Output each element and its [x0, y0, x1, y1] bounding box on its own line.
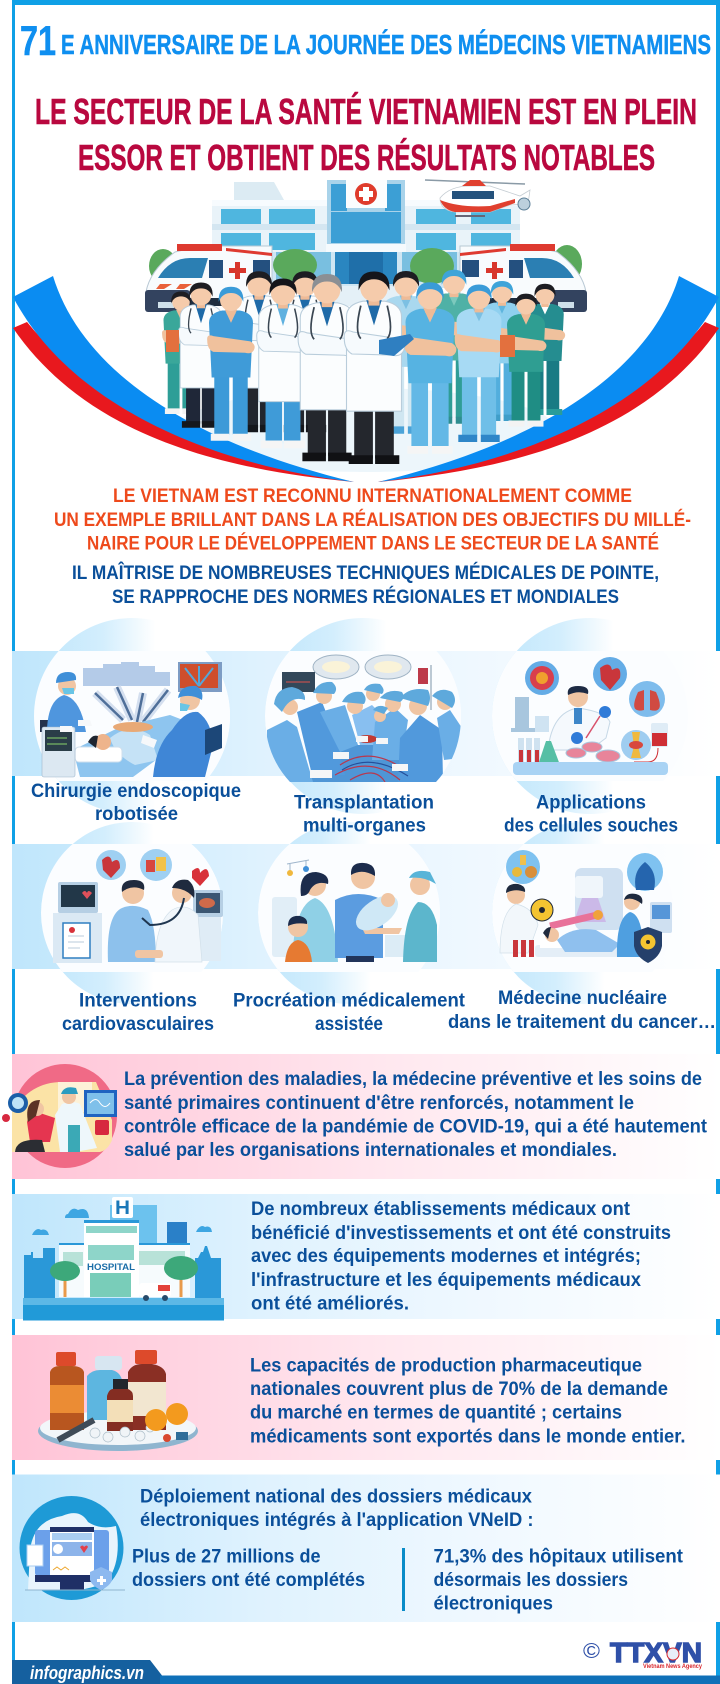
caption: robotic surgery: [31, 781, 241, 825]
footer bar with site name: [12, 1660, 720, 1684]
panel: nuclear medicine: [492, 822, 674, 1004]
ambulance right: [460, 244, 587, 312]
prevention text: salué par les organisations internationales et mondiales.: [124, 1140, 617, 1161]
caption: robotic surgery: Chirurgie endoscopique: [31, 781, 241, 802]
records heading: électroniques intégrés à l'application VNeID :: [140, 1510, 534, 1531]
panel: cardiovascular interventions: [41, 822, 223, 1004]
pharmaceuticals text: médicaments sont exportés dans le monde entier.: [250, 1426, 686, 1448]
logo: TTXVN: Vietnam News Agency: [643, 1664, 703, 1670]
icon: hospital scene: HOSPITAL: [87, 1262, 136, 1272]
panel: robotic endoscopic surgery: [34, 618, 230, 814]
hospital building: [212, 180, 520, 306]
intro statement in blue: IL MAÎTRISE DE NOMBREUSES TECHNIQUES MÉDICALES DE POINTE,: [72, 560, 659, 584]
caption: reproduction: assistée: [315, 1014, 383, 1035]
caption: reproduction: [233, 990, 466, 1035]
caption: transplant: [294, 792, 434, 836]
caption: nuclear medicine: [448, 988, 716, 1033]
caption: stem cells: [504, 792, 678, 836]
icon: hospital scene: H: [115, 1198, 130, 1219]
ambulance left: [145, 244, 272, 312]
helicopter: [425, 180, 530, 216]
caption: cardiovascular: Interventions: [79, 990, 197, 1012]
main heading: [35, 91, 697, 178]
caption: robotic surgery: robotisée: [95, 804, 178, 825]
infrastructure text: ont été améliorés.: [251, 1293, 409, 1314]
panel: infrastructure: [12, 1194, 720, 1320]
panel: prevention: [2, 1054, 720, 1179]
caption: cardiovascular: cardiovasculaires: [62, 1014, 214, 1035]
infrastructure text: De nombreux établissements médicaux ont: [251, 1199, 631, 1220]
prevention text: La prévention des maladies, la médecine préventive et les soins de: [124, 1069, 702, 1090]
caption: stem cells: Applications: [536, 792, 646, 814]
intro statement in blue: SE RAPPROCHE DES NORMES RÉGIONALES ET MONDIALES: [112, 585, 619, 608]
caption: cardiovascular: [62, 990, 214, 1035]
icon: vaccination: [2, 1064, 117, 1168]
prevention text: contrôle efficace de la pandémie de COVID-19, qui a été hautement: [124, 1116, 708, 1137]
pharmaceuticals text: nationales couvrent plus de 70% de la demande: [250, 1379, 668, 1400]
ground shadow: [176, 388, 556, 472]
intro statement in orange: LE VIETNAM EST RECONNU INTERNATIONALEMENT COMME: [113, 485, 632, 507]
caption: nuclear medicine: Médecine nucléaire: [498, 988, 667, 1009]
medical team: [162, 270, 565, 464]
icon: medicine bottles: [38, 1350, 198, 1451]
ribbon right: [378, 276, 719, 482]
logo: TTXVN: TTXVN: [610, 1637, 702, 1668]
panel: multi-organ transplant: [265, 618, 462, 814]
caption: transplant: Transplantation: [294, 792, 434, 814]
title: anniversary line: [20, 17, 711, 64]
footer bar with site name: infographics.vn: [30, 1663, 144, 1683]
prevention text: [124, 1069, 708, 1161]
intro statement in orange: [54, 485, 691, 554]
stat: 71.3 percent of hospitals: désormais les dossiers: [434, 1570, 628, 1591]
intro statement in blue: [72, 560, 659, 608]
icon: EMR screen: [20, 1496, 125, 1600]
caption: stem cells: des cellules souches: [504, 816, 678, 836]
caption: transplant: multi-organes: [303, 816, 426, 836]
infrastructure text: avec des équipements modernes et intégrés;: [251, 1246, 641, 1267]
hero illustration: ribbons, hospital and medical team: [13, 180, 719, 482]
stat: 27 million records: Plus de 27 millions de: [132, 1546, 320, 1567]
stat: 71.3 percent of hospitals: électroniques: [434, 1594, 553, 1615]
prevention text: santé primaires continuent d'être renforcés, notamment le: [124, 1093, 634, 1114]
icon: hospital scene: [23, 1197, 224, 1320]
panel: assisted reproduction: [258, 822, 440, 1004]
records heading: [140, 1486, 534, 1531]
caption: nuclear medicine: dans le traitement du cancer…: [448, 1012, 716, 1033]
panel: techniques row 1 band: [12, 651, 720, 776]
infrastructure text: bénéficié d'investissements et ont été construits: [251, 1223, 671, 1244]
divider: [402, 1548, 405, 1611]
caption: reproduction: Procréation médicalement: [233, 990, 466, 1012]
title: anniversary line: 71: [20, 17, 56, 64]
panel: electronic medical records: [12, 1474, 720, 1622]
records heading: Déploiement national des dossiers médicaux: [140, 1486, 532, 1507]
stat: 27 million records: [132, 1546, 365, 1591]
stat: 27 million records: dossiers ont été complétés: [132, 1570, 365, 1591]
stat: 71.3 percent of hospitals: 71,3% des hôpitaux utilisent: [434, 1546, 684, 1567]
infrastructure text: l'infrastructure et les équipements médicaux: [251, 1270, 641, 1291]
infrastructure text: [251, 1199, 671, 1314]
stat: 71.3 percent of hospitals: [434, 1546, 684, 1615]
panel: pharmaceuticals: [12, 1335, 720, 1460]
ribbon left: [13, 276, 354, 482]
pharmaceuticals text: [250, 1355, 686, 1448]
panel: stem cell applications: [492, 618, 668, 814]
trees: [149, 245, 582, 284]
pharmaceuticals text: Les capacités de production pharmaceutique: [250, 1355, 642, 1376]
pharmaceuticals text: du marché en termes de quantité ; certains: [250, 1403, 622, 1424]
logo: TTXVN: ©: [583, 1640, 601, 1663]
panel: techniques row 2 band: [12, 844, 720, 969]
